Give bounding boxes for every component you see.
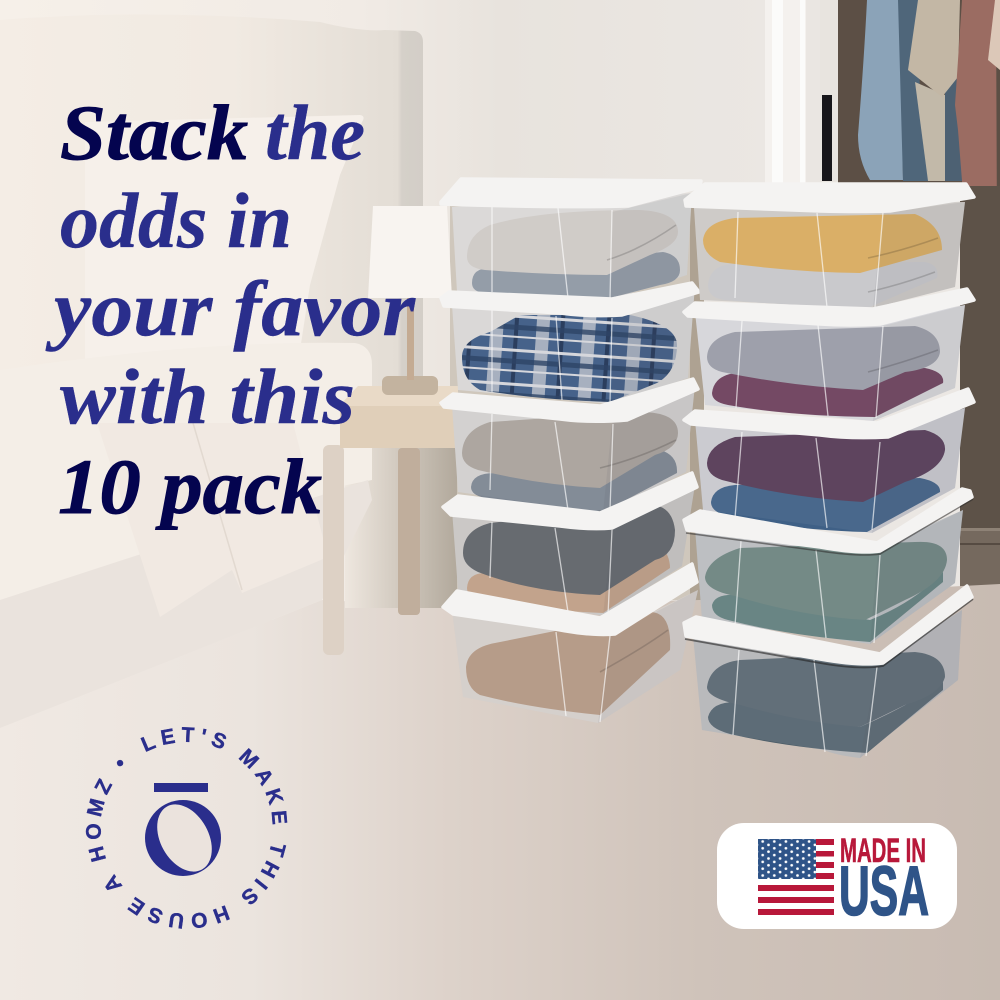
box L1 with grey blankets — [441, 179, 701, 300]
storage boxes: right stack — [684, 184, 974, 758]
box L3 with taupe blankets — [441, 379, 698, 513]
right wall and baseboard — [960, 186, 1000, 588]
box R1 with mustard and grey blankets — [685, 184, 974, 308]
closet with hanging clothes — [765, 0, 1000, 236]
brand seal — [86, 727, 288, 929]
headline — [45, 89, 416, 530]
flag icon — [758, 839, 834, 915]
box R5 with slate blankets — [684, 586, 973, 758]
box R2 with grey and plum blankets — [684, 289, 974, 421]
background: room wall — [0, 0, 1000, 620]
circular slogan: LET'S MAKE THIS HOUSE A HOMZ • — [86, 727, 288, 929]
storage boxes: left stack — [441, 179, 701, 723]
headline: Stack — [60, 89, 248, 176]
box R4 with sage blankets — [684, 489, 973, 644]
headline: with this — [60, 353, 355, 440]
made in USA badge — [717, 823, 957, 930]
box R3 with plum and blue blankets — [684, 389, 974, 533]
logo mark — [145, 783, 223, 881]
bed: headboard, pillow, mattress, blanket — [0, 14, 457, 728]
headline: the — [265, 89, 365, 176]
box L5 with tan blanket — [443, 564, 698, 723]
table lamp — [368, 206, 452, 395]
bedside table — [323, 386, 458, 655]
made in USA badge: USA — [839, 852, 929, 930]
headline: odds in — [60, 177, 292, 264]
headline: your favor — [45, 265, 416, 352]
badge text: MADE IN — [840, 832, 926, 870]
box L2 with plaid blanket — [441, 283, 699, 404]
box L4 with charcoal and tan blankets — [443, 473, 697, 616]
carpet floor — [0, 584, 1000, 1000]
headline: 10 pack — [58, 443, 322, 530]
